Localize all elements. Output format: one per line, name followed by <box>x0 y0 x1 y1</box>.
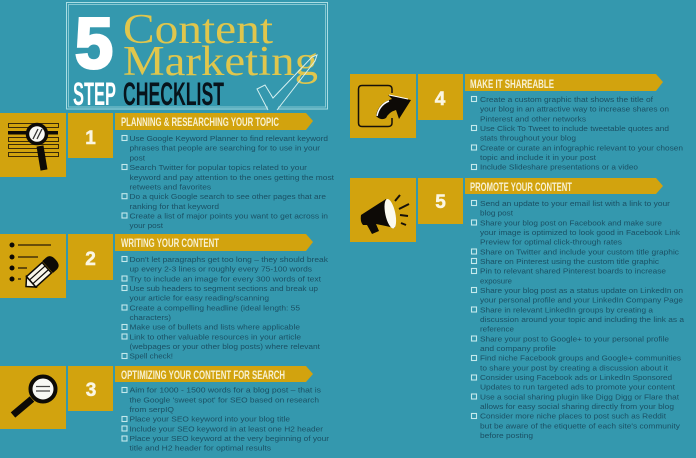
icon: magnifier over text lines <box>0 113 66 177</box>
checklist: writing: (webpages or your other blog posts) where relevant <box>130 342 321 351</box>
checklist: promote: Preview for optimal click-through rates <box>480 238 622 247</box>
checklist: planning: ranking for that keyword <box>130 202 219 211</box>
checklist: optimizing: from serpIQ <box>130 405 174 414</box>
checklist: promote: Share your blog post on Facebook and make sure <box>480 218 662 227</box>
step number 1: 1 <box>85 128 96 149</box>
panel: step 4 shareable <box>350 74 683 172</box>
title: Content: Content <box>123 7 273 53</box>
title: big 5: 5 <box>75 5 113 84</box>
checklist: promote: Consider using Facebook ads or LinkedIn Sponsored <box>480 373 672 382</box>
step number 3 <box>68 366 113 411</box>
checklist: writing: Don't let paragraphs get too long – they should break <box>130 255 328 264</box>
checklist: planning <box>122 134 335 230</box>
checklist: writing: Use sub headers to segment sections and break up <box>130 284 318 293</box>
panel: step 5 promote <box>350 178 685 440</box>
checklist: promote: Share your blog post as a status update on LinkedIn on <box>480 286 683 295</box>
checklist: writing: your article for easy reading/scanning <box>130 294 269 303</box>
checklist: shareable: topic and include it in your post <box>480 153 597 162</box>
checklist: writing: characters) <box>130 313 171 322</box>
icon: check mark <box>257 55 317 110</box>
step number 5 <box>418 178 463 224</box>
checklist: promote: allows for easy social sharing directly from your blog <box>480 402 674 411</box>
panel: step 2 writing <box>0 234 328 361</box>
checklist: promote: but be aware of the etiquette of each site's community <box>480 421 680 430</box>
checklist: promote: Find niche Facebook groups and Google+ communities <box>480 354 681 363</box>
checklist: promote: and company profile <box>480 344 556 353</box>
checklist: promote: exposure <box>480 276 512 285</box>
checklist: optimizing <box>122 386 329 453</box>
checklist: writing: Link to other valuable resources in your article <box>130 332 301 341</box>
checklist: writing: Try to include an image for every 300 words of text <box>130 274 322 283</box>
checklist: writing: up every 2-3 lines or roughly every 75-100 words <box>130 265 312 274</box>
step number 4: 4 <box>435 89 446 110</box>
checklist: optimizing: Aim for 1000 - 1500 words for a blog post – that is <box>130 386 321 395</box>
step number 2 <box>68 234 113 280</box>
checklist: writing: Spell check! <box>130 352 173 361</box>
heading: promote: PROMOTE YOUR CONTENT <box>470 182 572 194</box>
heading: optimizing: OPTIMIZING YOUR CONTENT FOR SEARCH <box>121 370 285 382</box>
checklist: planning: Do a quick Google search to see other pages that are <box>130 192 326 201</box>
checklist: shareable: Pinterest and other networks <box>480 114 586 123</box>
checklist: optimizing: the Google 'sweet spot' for SEO based on research <box>130 395 319 404</box>
heading: optimizing <box>115 366 313 382</box>
icon: magnifier <box>0 366 66 429</box>
step number 2: 2 <box>85 249 96 270</box>
checklist: writing: Create a compelling headline (ideal length: 55 <box>130 303 300 312</box>
checklist: promote: Consider more niche places to post such as Reddit <box>480 412 667 421</box>
panel: step 3 optimizing <box>0 366 329 453</box>
checklist: promote: to share your post by creating a discussion about it <box>480 363 669 372</box>
checklist: promote: discussion around your topic and including the link as a <box>480 315 685 324</box>
panel: step 1 planning <box>0 113 335 230</box>
checklist: promote: Send an update to your email list with a link to your <box>480 199 670 208</box>
checklist: promote: blog post <box>480 209 514 218</box>
title block <box>66 2 328 112</box>
checklist: promote: before posting <box>480 431 533 440</box>
checklist: promote: Updates to run targeted ads to promote your content <box>480 383 676 392</box>
checklist: promote: Use a social sharing plugin like Digg Digg or Flare that <box>480 392 680 401</box>
checklist: promote: reference <box>480 325 514 334</box>
icon: pencil and list <box>0 234 66 298</box>
checklist: planning: Create a list of major points you want to get across in <box>130 212 328 220</box>
icon: megaphone <box>350 178 416 242</box>
checklist: shareable: Create a custom graphic that shows the title of <box>480 95 654 104</box>
checklist: planning: Search Twitter for popular topics related to your <box>130 163 307 172</box>
checklist: promote: your image is optimized to look good in Facebook Link <box>480 228 680 237</box>
heading: shareable <box>465 74 663 91</box>
checklist: shareable <box>472 95 683 172</box>
title: Marketing: Marketing <box>123 39 318 85</box>
checklist: writing: Make use of bullets and lists where applicable <box>130 323 300 332</box>
checklist: promote: Share on Twitter and include your custom title graphic <box>480 247 679 256</box>
checklist: optimizing: Place your SEO keyword at the very beginning of your <box>130 434 329 443</box>
checklist: optimizing: Place your SEO keyword into your blog title <box>130 415 290 424</box>
step number 1 <box>68 113 113 158</box>
checklist: shareable: Create or curate an infographic relevant to your chosen <box>480 143 683 152</box>
checklist: shareable: your blog in an attractive way to increase shares on <box>480 105 669 114</box>
checklist: planning: retweets and favorites <box>130 182 211 192</box>
heading: shareable: MAKE IT SHAREABLE <box>470 79 554 91</box>
checklist: shareable: Include Slideshare presentations or a video <box>480 163 638 172</box>
title: STEP: STEP <box>73 76 116 112</box>
checklist: writing <box>122 255 328 361</box>
heading: promote <box>465 178 663 194</box>
checklist: promote <box>472 199 685 440</box>
title: CHECKLIST: CHECKLIST <box>123 76 224 112</box>
checklist: shareable: Use Click To Tweet to include tweetable quotes and <box>480 124 669 133</box>
checklist: planning: Use Google Keyword Planner to find relevant keyword <box>130 134 328 143</box>
checklist: optimizing: title and H2 header for optimal results <box>130 444 271 453</box>
checklist: planning: post <box>130 153 146 162</box>
heading: writing <box>115 234 313 251</box>
checklist: planning: phrases that people are searching for to use in your <box>130 144 320 153</box>
checklist: promote: Pin to relevant shared Pinterest boards to increase <box>480 267 666 276</box>
step number 5: 5 <box>435 192 446 213</box>
checklist: promote: your personal profile and your LinkedIn Company Page <box>480 296 683 305</box>
checklist: promote: Share your post to Google+ to your personal profile <box>480 334 669 343</box>
icon: share arrow <box>350 74 416 138</box>
step number 3: 3 <box>86 380 96 401</box>
checklist: shareable: stats throughout your blog <box>480 134 576 143</box>
checklist: promote: Share in relevant LinkedIn groups by creating a <box>480 305 654 314</box>
checklist: planning: keyword and pay attention to the ones getting the most <box>130 173 335 182</box>
heading: planning: PLANNING & RESEARCHING YOUR TOPIC <box>121 117 279 129</box>
checklist: promote: Share on Pinterest using the custom title graphic <box>480 257 659 266</box>
heading: planning <box>115 113 313 130</box>
step number 4 <box>418 74 463 120</box>
checklist: optimizing: Include your SEO keyword in at least one H2 header <box>130 424 323 433</box>
checklist: planning: your post <box>130 221 164 230</box>
heading: writing: WRITING YOUR CONTENT <box>121 238 219 250</box>
